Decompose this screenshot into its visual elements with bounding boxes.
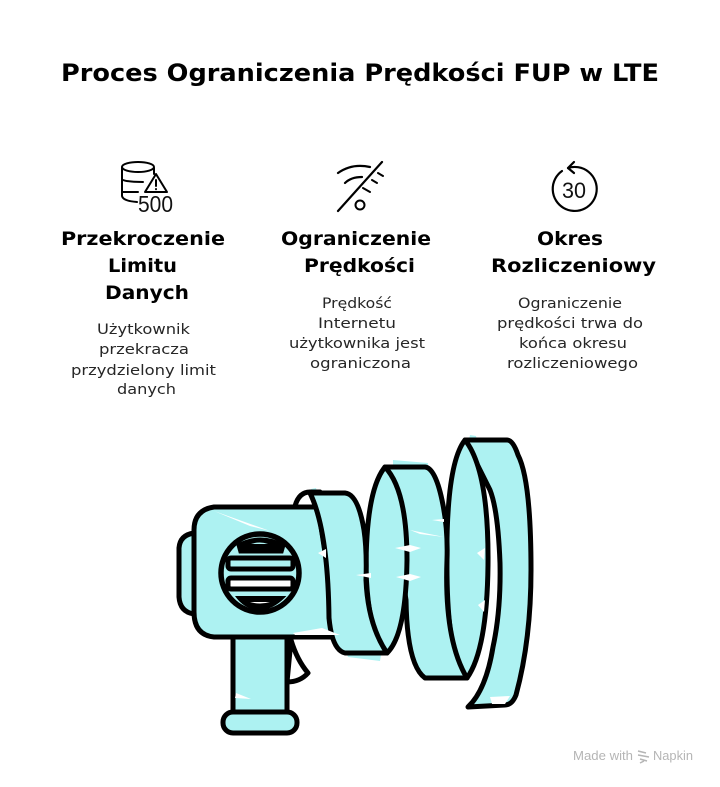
body — [194, 507, 338, 637]
icon: database with warning and 500 — [122, 162, 173, 217]
title: Proces Ograniczenia Prędkości FUP w LTE — [61, 59, 659, 87]
text: billing period description: Ograniczenie — [518, 296, 622, 312]
watermark: Made with Napkin — [573, 749, 693, 763]
text: speed limitation description: Prędkość — [322, 296, 392, 312]
sketch highlights — [214, 511, 510, 704]
heading: Okres Rozliczeniowy — [491, 228, 657, 277]
band 1 — [310, 493, 387, 653]
back tab — [295, 492, 320, 510]
text: data limit description: danych — [117, 382, 176, 398]
illustration: hair dryer with spiral — [179, 435, 531, 733]
rear cap — [179, 533, 194, 614]
text: billing period description: prędkości trwa do — [497, 316, 643, 332]
icon: database with warning and 500: 500 — [138, 191, 173, 217]
watermark: Made with Napkin: Made with — [573, 749, 633, 763]
text: data limit description: przydzielony limit — [71, 363, 216, 379]
sketch overshoot — [310, 435, 478, 661]
text: data limit description: przekracza — [99, 342, 189, 358]
panel: billing period — [491, 162, 657, 372]
heading: Przekroczenie Limitu Danych — [61, 228, 225, 304]
heading: Ograniczenie Prędkości: Prędkości — [304, 255, 415, 277]
heading: Przekroczenie Limitu Danych: Danych — [105, 282, 189, 304]
text: billing period description — [497, 296, 643, 372]
text: speed limitation description: ograniczona — [310, 356, 411, 372]
heading: Przekroczenie Limitu Danych: Limitu — [108, 255, 177, 277]
heading: Okres Rozliczeniowy: Rozliczeniowy — [491, 255, 657, 277]
text: billing period description: końca okresu — [519, 336, 627, 352]
icon: crossed-out wifi — [338, 162, 383, 211]
heading: Ograniczenie Prędkości: Ograniczenie — [281, 228, 431, 250]
vent grille — [221, 534, 299, 612]
panel: data limit exceeded — [61, 162, 225, 398]
text: data limit description — [71, 322, 216, 398]
text: billing period description: rozliczeniowego — [507, 356, 638, 372]
heading: Ograniczenie Prędkości — [281, 228, 431, 277]
handle base — [223, 712, 297, 733]
text: speed limitation description: użytkownika jest — [289, 336, 425, 352]
icon: 30-day cycle — [553, 162, 597, 211]
handle — [233, 636, 287, 716]
watermark: Made with Napkin: Napkin — [653, 749, 693, 763]
icon: 30-day cycle: 30 — [562, 178, 586, 203]
text: data limit description: Użytkownik — [97, 322, 191, 338]
text: speed limitation description: Internetu — [318, 316, 396, 332]
heading: Okres Rozliczeniowy: Okres — [537, 228, 603, 250]
oval 2 again on top — [366, 467, 407, 653]
text: speed limitation description — [289, 296, 425, 372]
panel: speed limitation — [281, 162, 431, 372]
trigger — [287, 640, 308, 682]
heading: Przekroczenie Limitu Danych: Przekroczenie — [61, 228, 225, 250]
outer band 3 — [465, 440, 531, 707]
band 2 — [385, 467, 467, 678]
oval 3 — [447, 440, 488, 678]
